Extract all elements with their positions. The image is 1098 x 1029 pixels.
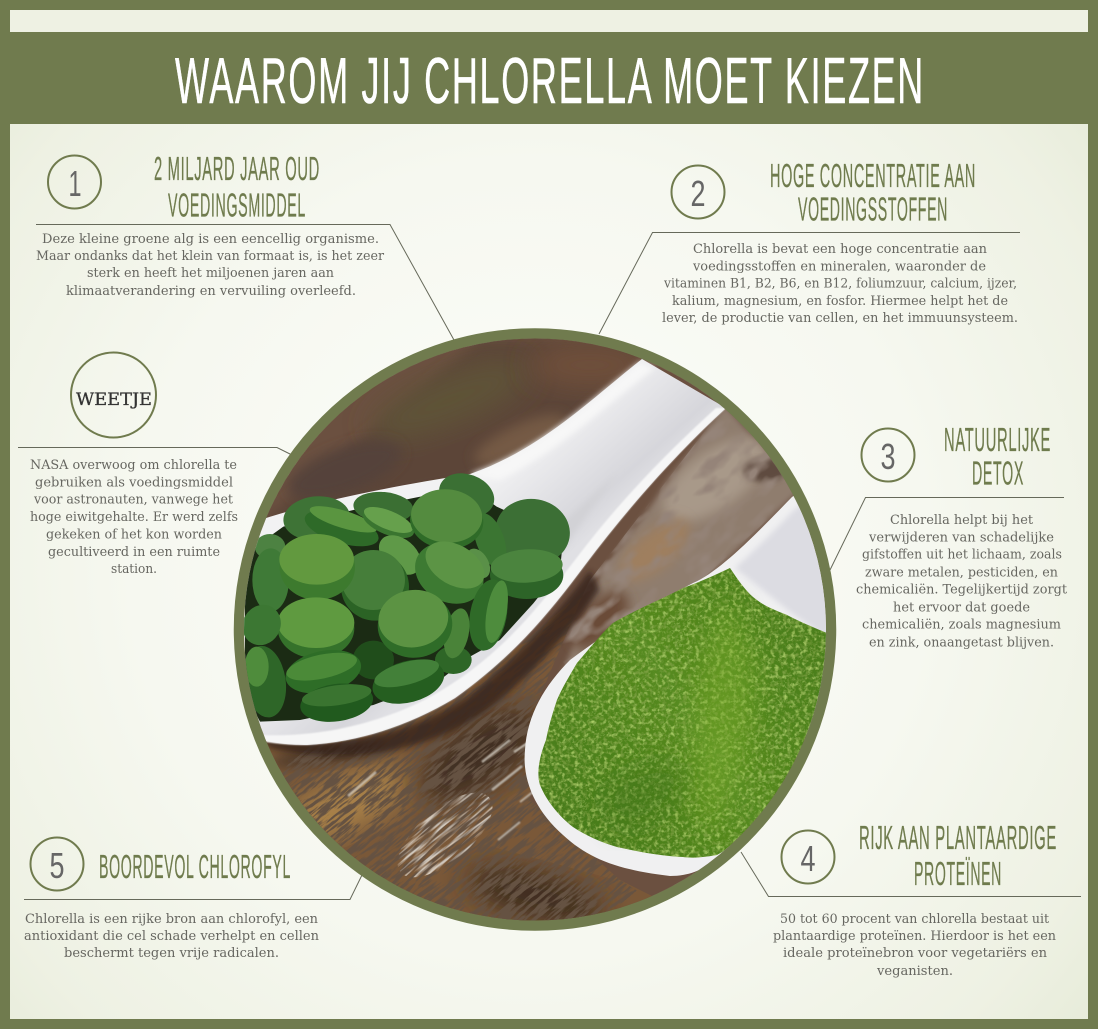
weetje text: voor astronauten, vanwege het xyxy=(33,492,234,508)
body text 4: 50 tot 60 procent van chlorella bestaat uit xyxy=(780,912,1050,927)
connector line: weetje xyxy=(18,448,292,455)
connector line: section 5 xyxy=(24,875,362,900)
spoon bowl shade xyxy=(520,470,620,600)
connector line: section 2 xyxy=(599,232,1020,334)
body text 5: beschermt tegen vrije radicalen. xyxy=(64,946,279,961)
sharp lower wood xyxy=(268,634,652,920)
body text 3 xyxy=(856,513,1068,650)
connector line: section 3 xyxy=(830,498,1064,570)
lower spoon xyxy=(525,470,830,876)
weetje text: hoge eiwitgehalte. Er werd zelfs xyxy=(30,510,238,525)
heading 2 xyxy=(770,157,976,228)
section 1: VOEDINGSMIDDEL xyxy=(168,186,306,224)
number badge 3: 3 xyxy=(880,436,896,477)
number badge 4: 4 xyxy=(800,838,816,879)
tablets xyxy=(235,466,575,726)
weetje text: gecultiveerd in een ruimte xyxy=(48,545,220,560)
wood grain xyxy=(282,622,636,920)
top strip xyxy=(10,10,1088,32)
number badge 5: 5 xyxy=(50,845,64,886)
heading 4 xyxy=(859,819,1057,892)
body text 1: Maar ondanks dat het klein van formaat is, is het zeer xyxy=(36,249,385,264)
body text 3: het ervoor dat goede xyxy=(893,600,1030,616)
powder highlights xyxy=(600,595,755,835)
green powder xyxy=(538,568,827,858)
spoon rim highlight xyxy=(255,408,726,745)
heading 1 xyxy=(154,150,320,224)
section 5 xyxy=(24,838,320,961)
text: BOORDEVOL CHLOROFYL xyxy=(99,848,291,885)
heading 3: DETOX xyxy=(972,454,1024,492)
section 3 xyxy=(856,421,1068,650)
heading 3 xyxy=(944,421,1051,492)
number badge 4 xyxy=(782,830,834,884)
weetje text: NASA overwoog om chlorella te xyxy=(30,458,237,473)
mid wood xyxy=(560,405,800,680)
body text 3: gifstoffen uit het lichaam, zoals xyxy=(862,548,1062,562)
photo ring xyxy=(239,334,831,926)
section 1 xyxy=(36,150,385,299)
body text 1: Deze kleine groene alg is een eencellig organisme. xyxy=(42,232,379,247)
body text 3: Chlorella helpt bij het xyxy=(890,513,1034,528)
connector line: section 1 xyxy=(36,224,454,340)
weetje badge: WEETJE xyxy=(76,390,152,410)
spoon shadow xyxy=(262,570,600,756)
body text 4: plantaardige proteïnen. Hierdoor is het een xyxy=(773,929,1057,944)
blurred upper wood xyxy=(273,338,636,516)
body text 5: antioxidant die cel schade verhelpt en cellen xyxy=(24,929,320,944)
white scratches xyxy=(398,792,492,878)
number badge 2 xyxy=(672,166,724,218)
weetje text xyxy=(30,458,238,577)
body text 5 xyxy=(24,912,320,961)
body text 2: Chlorella is bevat een hoge concentratie aan xyxy=(693,242,988,257)
body text 4: ideale proteïnebron voor vegetariërs en xyxy=(783,946,1048,961)
body text 1: sterk en heeft het miljoenen jaren aan xyxy=(87,266,335,281)
body text 2: kalium, magnesium, en fosfor. Hiermee helpt het de xyxy=(672,294,1008,309)
weetje text: station. xyxy=(111,562,157,577)
number badge 2: 2 xyxy=(690,173,706,214)
body text 4 xyxy=(773,912,1057,979)
number badge 3 xyxy=(862,428,914,482)
body text 4: veganisten. xyxy=(876,964,953,979)
weetje callout xyxy=(30,352,238,577)
section 1: 2 MILJARD JAAR OUD xyxy=(154,150,320,187)
body text 3: verwijderen van schadelijke xyxy=(868,530,1054,546)
body text 2: vitaminen B1, B2, B6, en B12, foliumzuur, calcium, ijzer, xyxy=(663,276,1017,292)
body text 5: Chlorella is een rijke bron aan chlorofyl, een xyxy=(25,912,319,927)
number badge 5 xyxy=(30,838,84,890)
lower spoon inner shade xyxy=(737,506,826,632)
body text 2: lever, de productie van cellen, en het immuunsysteem. xyxy=(662,311,1018,326)
central photo: chlorella tablets and powder on spoons xyxy=(234,328,836,931)
number badge 1 xyxy=(48,156,101,208)
section 2 xyxy=(662,157,1018,326)
connector line: section 4 xyxy=(741,852,1081,896)
tablet shadow xyxy=(245,490,563,722)
body text 2: voedingsstoffen en mineralen, waaronder de xyxy=(692,260,986,274)
upper spoon xyxy=(240,359,726,745)
body text 3: chemicaliën. Tegelijkertijd zorgt xyxy=(856,582,1068,598)
body text 3: en zink, onaangetast blijven. xyxy=(869,636,1054,650)
body text 1 xyxy=(36,232,385,299)
weetje text: gekeken of het kon worden xyxy=(46,528,223,542)
body text 1: klimaatverandering en vervuiling overleefd. xyxy=(66,284,356,299)
spoon top edge highlight xyxy=(470,362,655,480)
weetje text: gebruiken als voedingsmiddel xyxy=(35,476,233,490)
body text 3: chemicaliën, zoals magnesium xyxy=(862,618,1061,632)
section 4 xyxy=(773,819,1057,979)
photo content xyxy=(244,338,826,920)
weetje badge xyxy=(71,352,156,438)
wood table xyxy=(244,338,806,920)
body text 2 xyxy=(662,242,1018,326)
number badge 1: 1 xyxy=(68,163,82,204)
body text 3: zware metalen, pesticiden, en xyxy=(865,566,1059,580)
